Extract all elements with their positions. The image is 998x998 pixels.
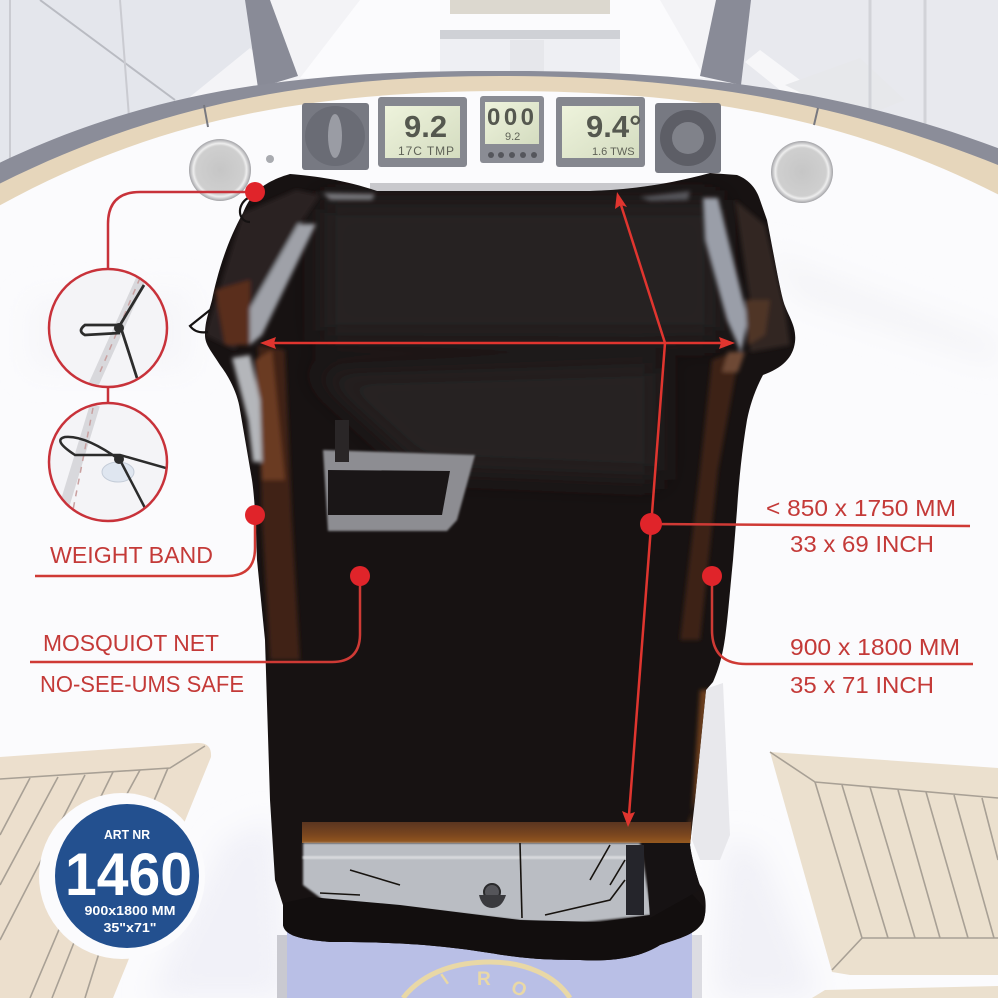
brown threshold strip bbox=[302, 822, 691, 843]
zoom circle lower: suction cup tie bbox=[49, 403, 167, 521]
callout: net size bbox=[702, 566, 973, 698]
windscreen and outside view bbox=[0, 0, 998, 210]
callout: opening size bbox=[640, 495, 970, 557]
callout: mosquito net: NO-SEE-UMS SAFE bbox=[40, 671, 244, 697]
zoom circle upper: weight band tie bbox=[49, 269, 167, 388]
floor mat with logo: R bbox=[477, 969, 491, 990]
lcd wind display bbox=[556, 97, 645, 167]
dimension arrows bbox=[270, 205, 725, 815]
callout: opening size: 33 x 69 INCH bbox=[790, 531, 934, 557]
grey frame arc bbox=[0, 71, 998, 260]
callout: net size: 35 x 71 INCH bbox=[790, 672, 934, 698]
lcd multi display: 000 bbox=[487, 104, 534, 131]
net side loops bbox=[190, 198, 250, 332]
lcd depth display: 17C TMP bbox=[398, 144, 454, 158]
callout: mosquito net: MOSQUIOT NET bbox=[43, 630, 219, 656]
deck teak left bbox=[0, 743, 211, 998]
callout: net size: 900 x 1800 MM bbox=[790, 634, 960, 660]
lcd depth display bbox=[378, 97, 467, 167]
door hinge plate bbox=[692, 683, 730, 860]
floor mat with logo bbox=[277, 925, 702, 998]
windscreen pillars bbox=[245, 0, 751, 88]
lcd multi display: 9.2 bbox=[505, 131, 520, 143]
window in door bbox=[323, 420, 475, 531]
deck teak right bbox=[770, 752, 998, 998]
gauge right bbox=[655, 103, 721, 173]
callout: opening size: < 850 x 1750 MM bbox=[766, 495, 956, 521]
mesh haze bbox=[310, 200, 720, 480]
lamp right bbox=[771, 141, 833, 203]
instrument panel bbox=[302, 96, 721, 173]
badge: article number: 900x1800 MM bbox=[84, 903, 176, 918]
wood trim arc bbox=[0, 76, 998, 270]
callout: weight band: WEIGHT BAND bbox=[50, 542, 213, 568]
badge: article number: ART NR bbox=[104, 827, 151, 842]
lcd wind display: 9.4° bbox=[586, 109, 642, 144]
door top trim bbox=[370, 183, 685, 191]
floor hasp bbox=[479, 884, 506, 908]
lcd wind display: 1.6 TWS bbox=[592, 146, 635, 158]
badge: article number bbox=[39, 793, 205, 959]
callout: weight band bbox=[35, 505, 265, 576]
arrow heads bbox=[260, 192, 735, 827]
door frame brown and reflections bbox=[205, 190, 790, 845]
dot: weight band top bbox=[245, 182, 265, 202]
gathered hem bottom bbox=[283, 898, 706, 960]
panel screw bbox=[266, 155, 274, 163]
lcd depth display: 9.2 bbox=[404, 109, 447, 144]
right open mesh strip bbox=[626, 845, 644, 915]
callout: mosquito net bbox=[30, 566, 370, 697]
floor mat with logo: I bbox=[437, 970, 452, 988]
mosquito net over doorway bbox=[190, 160, 810, 970]
leader: weight band detail bbox=[108, 192, 255, 403]
right fold over grey bbox=[648, 843, 699, 915]
lcd multi display bbox=[480, 96, 544, 163]
net folds on panel bbox=[320, 843, 625, 918]
wood trim joints bbox=[204, 105, 818, 127]
grey step panel bbox=[303, 843, 652, 925]
lamp left bbox=[189, 139, 251, 201]
soft cabin shadows bbox=[30, 250, 998, 998]
badge: article number: 1460 bbox=[65, 841, 192, 908]
gauge left bbox=[302, 103, 369, 170]
badge: article number: 35"x71" bbox=[104, 920, 156, 935]
